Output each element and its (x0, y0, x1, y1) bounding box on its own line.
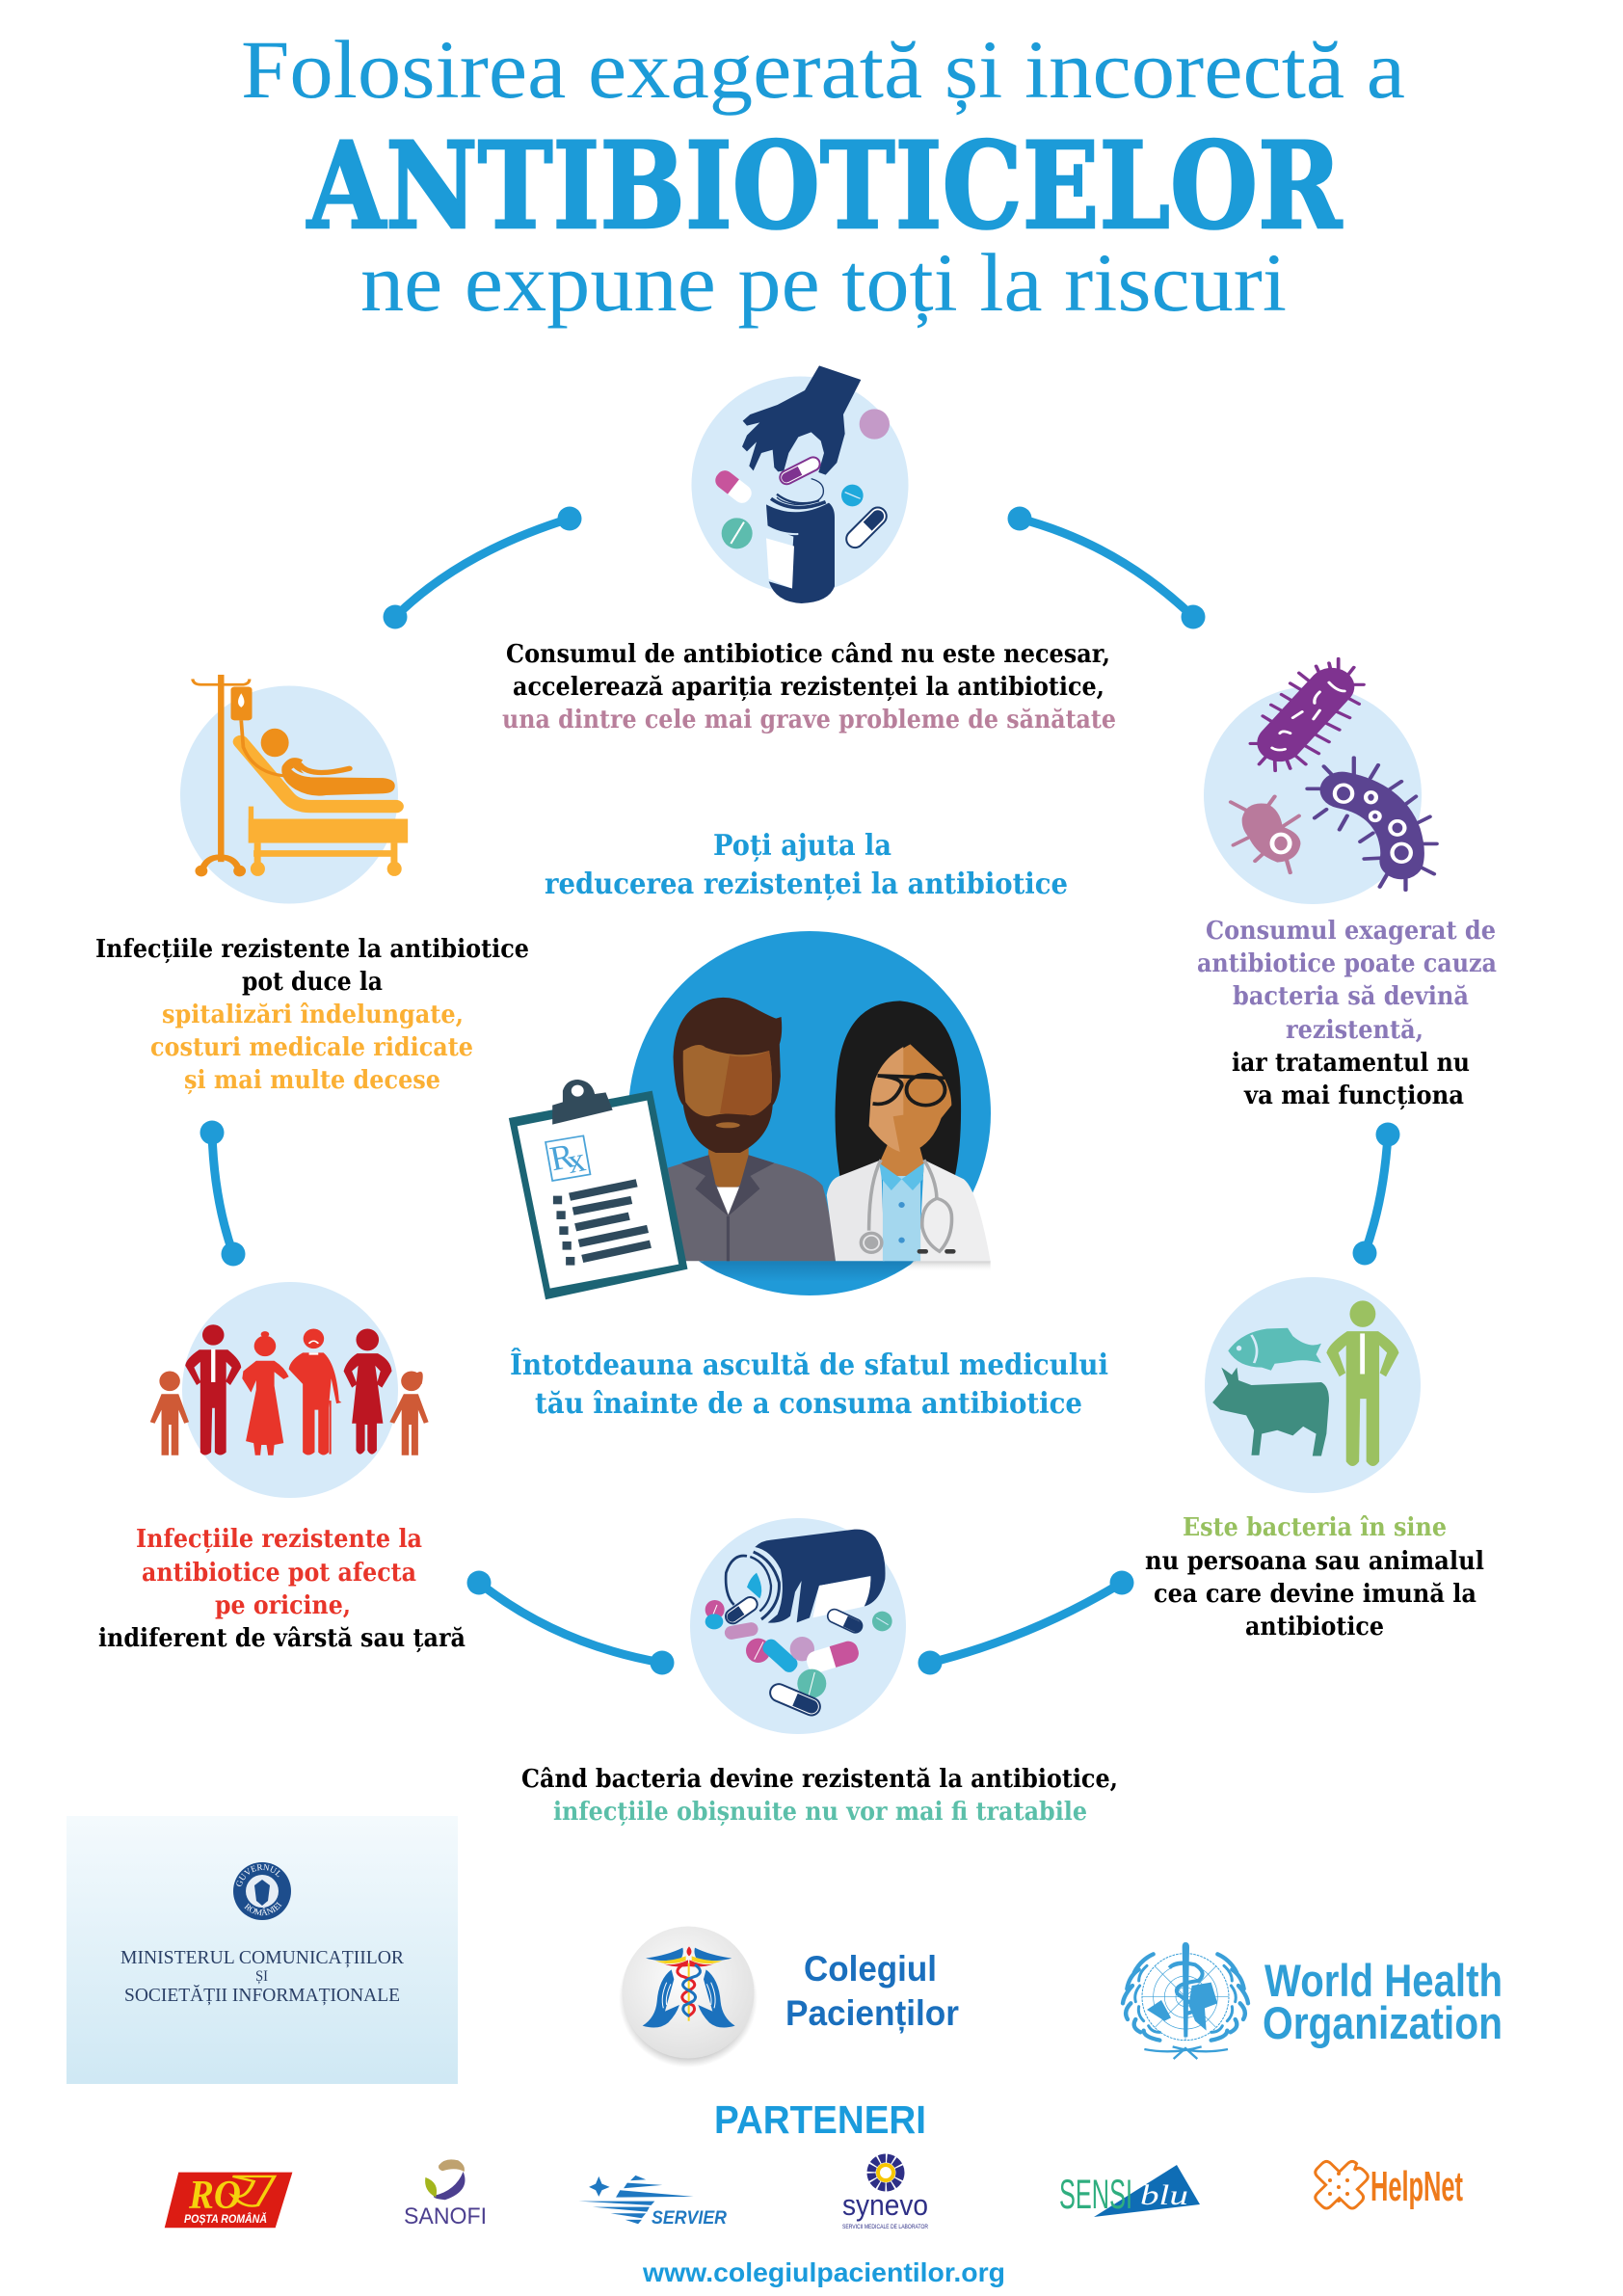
icon: spilled pills bottle (690, 1518, 906, 1734)
logo panel: ministry: ROMÂNIEI (244, 1901, 281, 1916)
connector arcs (200, 507, 1399, 1675)
text: bacteria becomes resistant: antibiotice poate cauza (1197, 948, 1497, 978)
heading: partners: PARTENERI (714, 2097, 926, 2142)
text: hospitalisation, costs, deaths: pot duce la (242, 967, 383, 997)
text: affects anyone (98, 1524, 466, 1653)
text: hospitalisation, costs, deaths (95, 934, 529, 1095)
logo panel: ministry: ȘI (255, 1968, 268, 1985)
logo: Colegiul Pacienților: Pacienților (785, 1993, 959, 2034)
logo: Sanofi: SANOFI (404, 2203, 487, 2229)
text: affects anyone: indiferent de vârstă sau țară (98, 1623, 466, 1653)
title: ANTIBIOTICELOR (306, 117, 1343, 256)
logo: World Health Organization (1123, 1942, 1503, 2059)
title: ne expune pe toți la riscuri (360, 236, 1287, 329)
logo: Servier (578, 2176, 727, 2229)
logo panel: ministry (67, 1816, 458, 2084)
illustration: patient and doctor with prescription: x (564, 1139, 589, 1181)
text: bacteria becomes resistant: iar tratamentul nu (1232, 1048, 1470, 1078)
logo: Poșta Română: RO (188, 2174, 241, 2218)
text: common infections untreatable: infecțiile obișnuite nu vor mai fi tratabile (553, 1797, 1087, 1827)
heading: always listen to doctor: Întotdeauna ascultă de sfatul medicului (510, 1348, 1108, 1382)
clipboard (509, 1080, 687, 1299)
text: unnecessary antibiotic use: una dintre cele mai grave probleme de sănătate (502, 705, 1116, 734)
text: the bacteria itself: antibiotice (1245, 1612, 1384, 1642)
text: hospitalisation, costs, deaths: costuri medicale ridicate (150, 1032, 473, 1062)
logo: World Health Organization: Organization (1263, 1997, 1503, 2048)
logo panel: ministry: SOCIETĂȚII INFORMAȚIONALE (124, 1984, 400, 2006)
man (668, 998, 836, 1261)
text: the bacteria itself: nu persoana sau animalul (1145, 1546, 1484, 1576)
title: Folosirea exagerată și incorectă a (241, 23, 1405, 116)
logo: Synevo: SERVICII MEDICALE DE LABORATOR (842, 2225, 929, 2230)
text: bacteria becomes resistant: Consumul exagerat de (1206, 916, 1496, 946)
text: bacteria becomes resistant (1197, 916, 1497, 1110)
text: bacteria becomes resistant: rezistentă, (1286, 1015, 1423, 1045)
website: www.colegiulpacientilor.org (642, 2257, 1005, 2287)
logo: Poșta Română: POȘTA ROMÂNĂ (184, 2211, 267, 2226)
illustration: patient and doctor with prescription (509, 931, 991, 1299)
text: affects anyone: Infecțiile rezistente la (136, 1524, 422, 1554)
heading: you can help (545, 829, 1068, 901)
text: affects anyone: pe oricine, (215, 1590, 351, 1620)
logo: Help Net (1300, 2147, 1463, 2223)
heading: you can help: Poți ajuta la (713, 829, 891, 863)
text: unnecessary antibiotic use: accelerează apariția rezistenței la antibiotice, (513, 672, 1104, 702)
text: the bacteria itself (1145, 1512, 1484, 1642)
text: bacteria becomes resistant: bacteria să devină (1233, 981, 1469, 1011)
heading: you can help: reducerea rezistenței la antibiotice (545, 868, 1068, 901)
logo: Synevo (842, 2158, 929, 2230)
icon: fish, cow and man (1205, 1277, 1421, 1493)
logo: Colegiul Pacienților (619, 1926, 959, 2068)
text: hospitalisation, costs, deaths: și mai multe decese (184, 1065, 440, 1095)
icon: family of all ages (150, 1282, 429, 1498)
icon: bacteria (1204, 658, 1437, 904)
title (241, 23, 1405, 329)
text: hospitalisation, costs, deaths: spitalizări îndelungate, (162, 1000, 464, 1029)
text: unnecessary antibiotic use (502, 639, 1116, 734)
logo: Servier: SERVIER (652, 2208, 727, 2229)
logo: Sensiblu: blu (1140, 2179, 1188, 2211)
logo: World Health Organization: World Health (1264, 1955, 1503, 2006)
logo: Help Net: HelpNet (1370, 2163, 1463, 2210)
logo: Sanofi (404, 2159, 487, 2229)
text: unnecessary antibiotic use: Consumul de antibiotice când nu este necesar, (506, 639, 1110, 669)
logo: Poșta Română (165, 2173, 292, 2228)
text: affects anyone: antibiotice pot afecta (142, 1558, 416, 1588)
woman doctor (827, 1001, 991, 1261)
heading: always listen to doctor: tău înainte de a consuma antibiotice (535, 1387, 1082, 1421)
text: the bacteria itself: cea care devine imună la (1154, 1579, 1477, 1609)
logo panel: ministry: MINISTERUL COMUNICAȚIILOR (120, 1947, 404, 1968)
logo panel: ministry: GUVERNUL (236, 1864, 280, 1886)
text: bacteria becomes resistant: va mai funcționa (1243, 1081, 1464, 1110)
icon: hand picking pill from bottle (692, 365, 908, 603)
illustration: patient and doctor with prescription: R (546, 1135, 577, 1178)
logo: Sensiblu: SENSI (1059, 2172, 1132, 2218)
text: common infections untreatable: Când bacteria devine rezistentă la antibiotice, (521, 1764, 1118, 1794)
logo: Synevo: synevo (842, 2188, 928, 2222)
icon: hospital bed patient (180, 675, 408, 904)
text: the bacteria itself: Este bacteria în sine (1183, 1512, 1447, 1542)
text: common infections untreatable (521, 1764, 1118, 1827)
heading: always listen to doctor (510, 1348, 1108, 1421)
logo: Colegiul Pacienților: Colegiul (804, 1949, 937, 1989)
text: hospitalisation, costs, deaths: Infecțiile rezistente la antibiotice (95, 934, 529, 964)
